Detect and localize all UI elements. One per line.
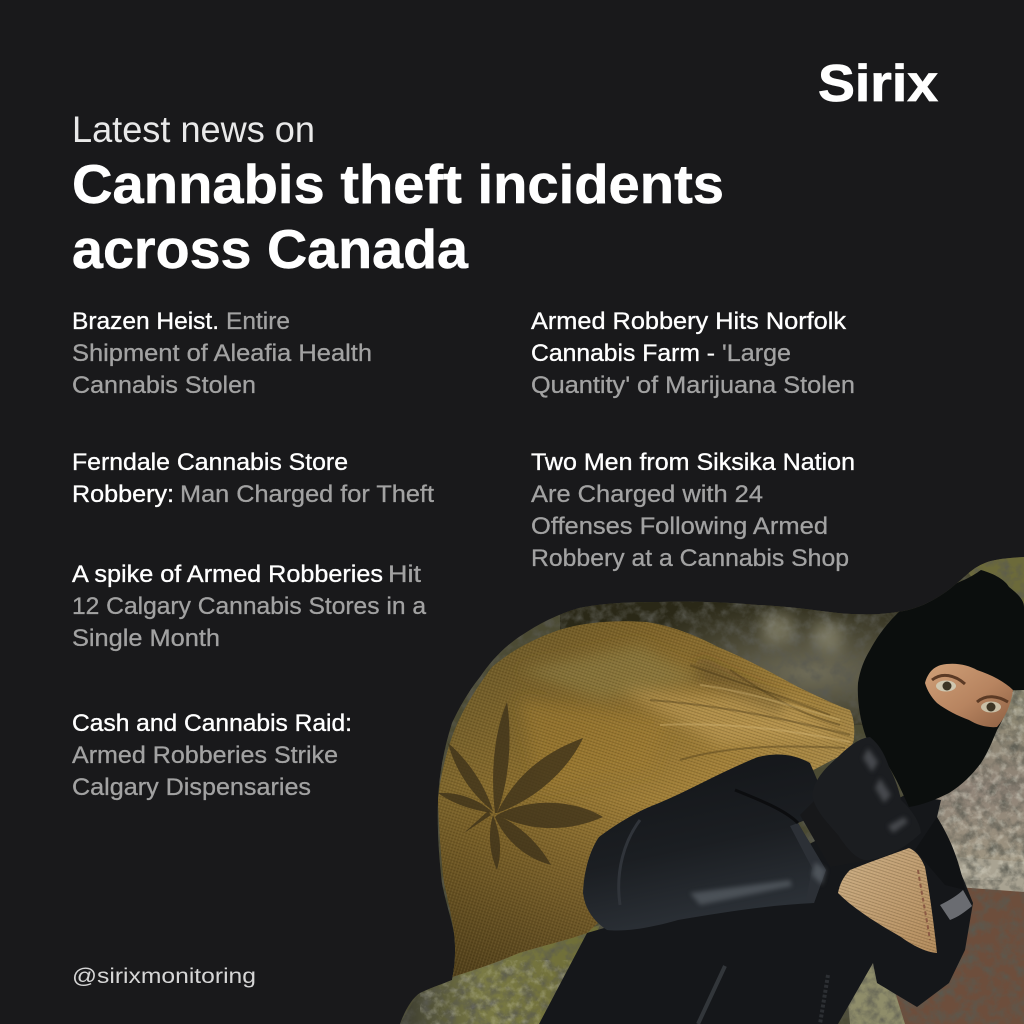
news item: Siksika Nation [531, 449, 855, 572]
news item: Cash and cannabis raid [72, 710, 352, 801]
stone wall [400, 550, 1024, 1024]
burlap sack [430, 610, 860, 990]
eye opening [925, 664, 1013, 727]
title [72, 109, 724, 280]
sack folds [650, 665, 850, 760]
news item: Ferndale store: Robbery: [72, 481, 174, 508]
news item: Ferndale store: Ferndale Cannabis Store [72, 449, 348, 476]
news item: Calgary spike: Hit [388, 561, 421, 588]
news item: Calgary spike [72, 561, 427, 652]
news item: Aleafia shipment: Entire [226, 308, 290, 335]
cuff [790, 824, 823, 866]
news item: Norfolk farm [531, 308, 855, 399]
news item: Norfolk farm: Cannabis Farm - [531, 340, 715, 367]
news item: Aleafia shipment: Shipment of Aleafia Health [72, 340, 372, 367]
title kicker: Latest news on [72, 109, 315, 150]
news item: Ferndale store: Man Charged for Theft [180, 481, 434, 508]
title line two: across Canada [72, 218, 468, 280]
news item: Siksika Nation: Two Men from Siksika Nation [531, 449, 855, 476]
title line one: Cannabis theft incidents [72, 153, 724, 215]
news item: Calgary spike: A spike of Armed Robberies [72, 561, 383, 588]
news item: Siksika Nation: Offenses Following Armed [531, 513, 828, 540]
news item: Cash and cannabis raid: Armed Robberies Strike [72, 742, 338, 769]
torso and far arm [539, 795, 973, 1024]
right eye [981, 702, 1001, 712]
news item: Norfolk farm: Quantity' of Marijuana Stolen [531, 372, 855, 399]
balaclava hood and face [858, 570, 1024, 807]
jacket zip [698, 966, 725, 1024]
news item: Cash and cannabis raid: Cash and Cannabis Raid: [72, 710, 352, 737]
logo: Sirix: Sirix [818, 55, 938, 113]
news item: Siksika Nation: Robbery at a Cannabis Shop [531, 545, 849, 572]
news item: Norfolk farm: 'Large [722, 340, 791, 367]
news item: Norfolk farm: Armed Robbery Hits Norfolk [531, 308, 847, 335]
news item: Ferndale store [72, 449, 434, 508]
news item: Calgary spike: 12 Calgary Cannabis Stores in a [72, 593, 427, 620]
news item: Siksika Nation: Are Charged with 24 [531, 481, 763, 508]
leather highlights [690, 862, 826, 905]
news item: Aleafia shipment [72, 308, 372, 399]
news item: Aleafia shipment: Cannabis Stolen [72, 372, 256, 399]
sack end [838, 848, 937, 953]
news item: Cash and cannabis raid: Calgary Dispensaries [72, 774, 311, 801]
news item: Aleafia shipment: Brazen Heist. [72, 308, 219, 335]
left eye [936, 680, 956, 692]
illustration: masked thief carrying a cannabis sack [400, 550, 1024, 1024]
news item: Calgary spike: Single Month [72, 625, 220, 652]
cannabis leaf print [438, 702, 603, 870]
leather gloves [804, 737, 910, 841]
near arm in leather jacket [583, 755, 830, 931]
social handle: @sirixmonitoring [72, 965, 256, 988]
